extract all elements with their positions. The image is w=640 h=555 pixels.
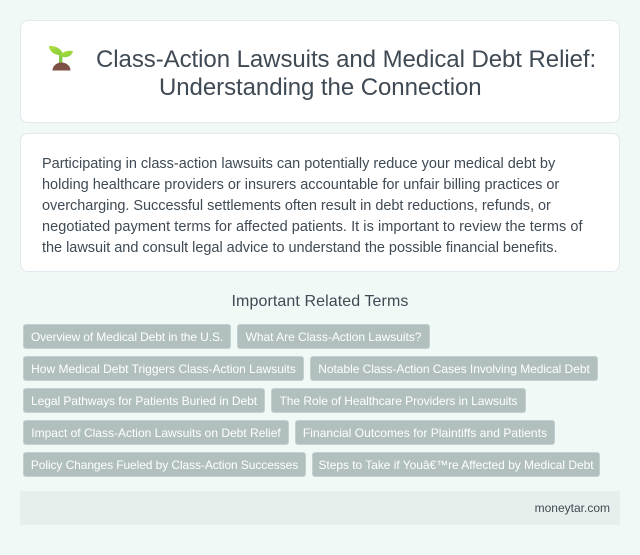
tag list <box>23 324 600 477</box>
footer bar <box>20 491 620 525</box>
summary paragraph <box>42 156 583 256</box>
tag <box>23 324 231 349</box>
tag <box>23 356 304 381</box>
tag <box>271 388 526 413</box>
icon: seedling <box>49 46 73 70</box>
summary paragraph: Participating in class-action lawsuits can potentially reduce your medical debt by <box>42 156 555 172</box>
summary paragraph: the lawsuit and consult legal advice to understand the possible financial benefits. <box>42 240 558 256</box>
tag: Policy Changes Fueled by Class-Action Successes <box>31 458 298 472</box>
tag: Impact of Class-Action Lawsuits on Debt Relief <box>31 426 281 440</box>
tag <box>23 388 265 413</box>
tag <box>295 420 555 445</box>
footer source text: moneytar.com <box>535 501 610 515</box>
panel: title card <box>20 20 620 123</box>
summary paragraph: negotiated payment terms for affected patients. It is important to review the terms of <box>42 219 583 235</box>
tag: What Are Class-Action Lawsuits? <box>246 330 421 344</box>
tag: The Role of Healthcare Providers in Lawsuits <box>280 394 517 408</box>
tag <box>237 324 430 349</box>
heading line 1: Class-Action Lawsuits and Medical Debt Relief: <box>96 46 596 73</box>
tag <box>23 452 306 477</box>
tag: How Medical Debt Triggers Class-Action Lawsuits <box>31 362 296 376</box>
panel: summary text <box>20 133 620 272</box>
tag <box>310 356 598 381</box>
tag <box>23 420 289 445</box>
section heading: Important Related Terms <box>232 293 408 310</box>
tag: Overview of Medical Debt in the U.S. <box>31 330 223 344</box>
tag: Legal Pathways for Patients Buried in Debt <box>31 394 257 408</box>
tag: Steps to Take if Youâ€™re Affected by Medical Debt <box>318 458 594 472</box>
tag: Financial Outcomes for Plaintiffs and Patients <box>303 426 547 440</box>
tag: Notable Class-Action Cases Involving Medical Debt <box>318 362 590 376</box>
summary paragraph: overcharging. Successful settlements often result in debt reductions, refunds, or <box>42 198 551 214</box>
summary paragraph: holding healthcare providers or insurers accountable for unfair billing practices or <box>42 177 559 193</box>
heading line 2: Understanding the Connection <box>159 74 482 101</box>
tag <box>312 452 600 477</box>
